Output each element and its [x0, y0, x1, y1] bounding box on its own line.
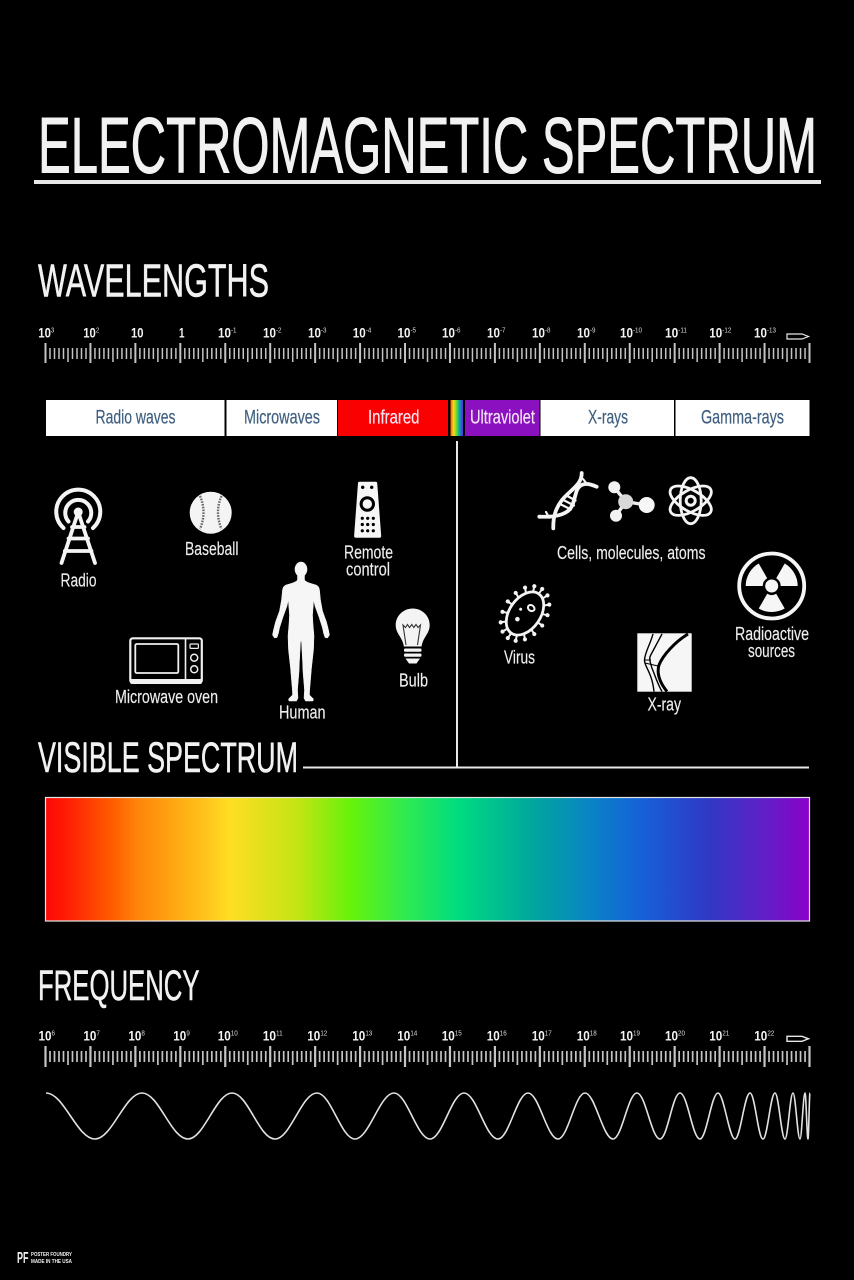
band: ultraviolet — [465, 400, 540, 436]
wavelength scale labels: 10 — [487, 325, 503, 341]
frequency scale labels: 14 — [410, 1029, 417, 1038]
frequency scale labels — [38, 1028, 774, 1044]
band: x-rays: X-rays — [588, 408, 628, 428]
wavelength ruler — [46, 343, 810, 363]
frequency scale labels: 10 — [397, 1028, 413, 1044]
wavelength scale labels: -12 — [722, 326, 731, 335]
band: microwaves: Microwaves — [244, 408, 320, 428]
wavelength scale labels: 10 — [532, 325, 548, 341]
frequency scale labels: 16 — [500, 1029, 507, 1038]
icon: human — [272, 562, 330, 701]
band: visible sliver — [450, 400, 463, 436]
icon: virus — [488, 574, 562, 653]
wavelength scale labels: 3 — [51, 326, 54, 335]
icon: dna helix — [539, 473, 597, 528]
wavelength scale labels: 10 — [665, 325, 681, 341]
wavelength scale labels: 10 — [398, 325, 413, 341]
wavelength scale labels: -6 — [455, 326, 460, 335]
heading: frequency: FREQUENCY — [38, 962, 200, 1010]
frequency scale labels: 6 — [52, 1029, 55, 1038]
wavelength scale labels: -7 — [500, 326, 506, 335]
icon: atom — [666, 478, 716, 524]
wavelength scale labels: 2 — [96, 326, 99, 335]
wavelength scale labels — [38, 325, 776, 341]
label: radioactive sources — [735, 624, 809, 661]
frequency scale labels: 13 — [365, 1029, 372, 1038]
band: microwaves — [226, 400, 337, 436]
frequency scale labels: 10 — [38, 1028, 54, 1044]
frequency scale labels: 19 — [633, 1029, 640, 1038]
icon: remote control — [354, 482, 381, 538]
frequency scale labels: 12 — [320, 1029, 327, 1038]
band: gamma-rays: Gamma-rays — [701, 408, 784, 428]
wavelength scale labels: 10 — [709, 325, 725, 341]
frequency scale labels: 10 — [665, 1028, 681, 1044]
icon: microwave oven — [130, 638, 202, 684]
icon: bulb — [396, 608, 430, 664]
band: radio waves — [46, 400, 224, 436]
frequency scale labels: 10 — [754, 1028, 770, 1044]
frequency scale labels: 7 — [96, 1029, 100, 1038]
frequency scale labels: 10 — [263, 1028, 278, 1044]
footer logo: PF — [17, 1250, 29, 1267]
frequency scale labels: 10 — [487, 1028, 502, 1044]
wavelength scale labels: 10 — [353, 325, 368, 341]
icon: baseball — [190, 492, 232, 534]
band: radio waves: Radio waves — [96, 408, 176, 428]
label: remote control: control — [346, 559, 390, 579]
frequency scale labels: 9 — [186, 1029, 190, 1038]
wavelength scale labels: 10 — [442, 325, 458, 341]
wavelength scale labels: -8 — [545, 326, 550, 335]
wavelength scale labels: -3 — [321, 326, 326, 335]
wavelength scale labels: 10 — [131, 325, 144, 341]
frequency scale labels: 10 — [173, 1028, 189, 1044]
wavelength scale labels: -9 — [590, 326, 596, 335]
frequency scale labels: 10 — [709, 1028, 725, 1044]
wavelength scale labels: -11 — [678, 326, 687, 335]
footer logo: POSTER FOUNDRY — [31, 1252, 72, 1258]
footer logo — [17, 1250, 72, 1267]
label: cells, molecules, atoms: Cells, molecules, atoms — [557, 543, 706, 563]
band: ultraviolet: Ultraviolet — [470, 408, 536, 428]
heading: wavelengths: WAVELENGTHS — [38, 254, 269, 306]
icon: molecule — [608, 481, 655, 522]
frequency scale labels: 10 — [83, 1028, 99, 1044]
label: human: Human — [279, 702, 326, 722]
frequency scale labels: 10 — [231, 1029, 238, 1038]
frequency scale labels: 10 — [218, 1028, 233, 1044]
wavelength direction arrow — [787, 334, 808, 339]
frequency scale labels: 8 — [141, 1029, 145, 1038]
wavelength scale labels: -5 — [410, 326, 416, 335]
wavelength scale labels: -2 — [276, 326, 282, 335]
frequency scale labels: 10 — [128, 1028, 144, 1044]
icon: radioactive symbol — [739, 554, 804, 618]
label: radioactive sources: sources — [748, 641, 795, 661]
label: microwave oven: Microwave oven — [115, 687, 218, 707]
spectrum band — [46, 400, 810, 436]
frequency scale labels: 10 — [307, 1028, 323, 1044]
wavelength scale labels: -13 — [767, 326, 776, 335]
title underline — [34, 180, 821, 184]
frequency scale labels: 10 — [620, 1028, 636, 1044]
frequency scale labels: 10 — [442, 1028, 457, 1044]
wavelength scale labels: 1 — [179, 325, 185, 341]
frequency scale labels: 22 — [767, 1029, 774, 1038]
icon: x-ray — [637, 633, 692, 692]
frequency scale labels: 17 — [545, 1029, 552, 1038]
label: bulb: Bulb — [399, 670, 428, 690]
frequency scale labels: 18 — [590, 1029, 597, 1038]
connector from visible sliver to visible spectrum — [303, 441, 809, 768]
wavelength scale labels: -4 — [366, 326, 371, 335]
frequency scale labels: 21 — [722, 1029, 729, 1038]
frequency scale labels: 10 — [532, 1028, 547, 1044]
frequency ruler — [46, 1046, 810, 1067]
label: x-ray: X-ray — [648, 695, 681, 715]
frequency wave — [46, 1093, 810, 1139]
frequency scale labels: 11 — [276, 1029, 283, 1038]
band: infrared: Infrared — [368, 408, 420, 428]
wavelength scale labels: 10 — [754, 325, 770, 341]
label: remote control: Remote — [344, 542, 393, 562]
wavelength scale labels: -10 — [633, 326, 642, 335]
heading: visible spectrum: VISIBLE SPECTRUM — [38, 734, 298, 782]
frequency direction arrow — [787, 1036, 808, 1041]
wavelength scale labels: -1 — [231, 326, 236, 335]
label: remote control — [344, 542, 393, 579]
label: radioactive sources: Radioactive — [735, 624, 809, 644]
wavelength scale labels: 10 — [83, 325, 99, 341]
visible spectrum gradient bar — [46, 798, 810, 921]
wavelength scale labels: 10 — [263, 325, 279, 341]
wavelength scale labels: 10 — [308, 325, 324, 341]
label: baseball: Baseball — [185, 539, 238, 559]
label: radio: Radio — [60, 570, 96, 590]
wavelength scale labels: 10 — [38, 325, 54, 341]
band: x-rays — [540, 400, 674, 436]
frequency scale labels: 10 — [577, 1028, 592, 1044]
label: virus: Virus — [504, 647, 535, 667]
icon: radio tower — [56, 490, 100, 563]
frequency scale labels: 10 — [352, 1028, 368, 1044]
wavelength scale labels: 10 — [577, 325, 593, 341]
wavelength scale labels: 10 — [218, 325, 234, 341]
band: gamma-rays — [676, 400, 810, 436]
frequency scale labels: 20 — [678, 1029, 685, 1038]
frequency scale labels: 15 — [455, 1029, 462, 1038]
wavelength scale labels: 10 — [620, 325, 636, 341]
band: infrared — [338, 400, 448, 436]
footer logo: MADE IN THE USA — [31, 1259, 72, 1265]
